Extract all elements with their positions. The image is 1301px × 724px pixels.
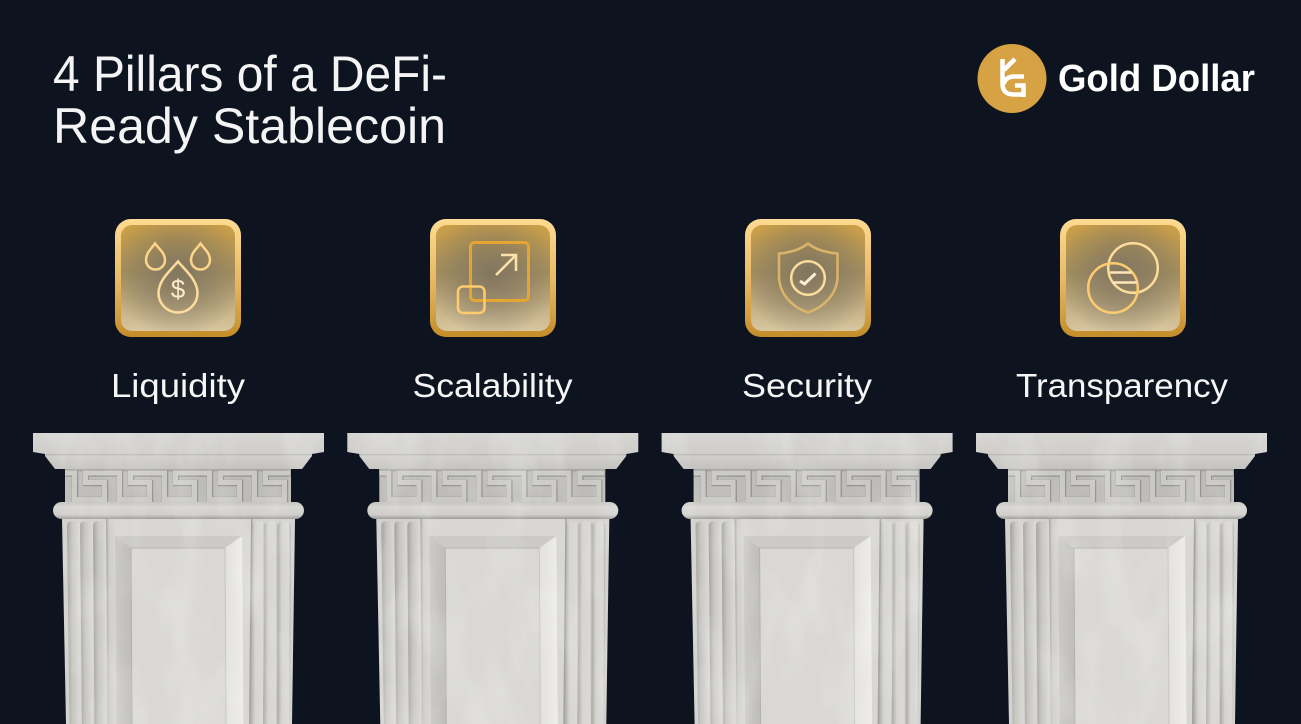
pillar [662, 433, 953, 724]
icon: scaling squares [430, 219, 556, 337]
title [53, 46, 447, 154]
icon: overlapping coins [1060, 219, 1186, 337]
icon: liquidity drops [115, 219, 241, 337]
pillar column: Liquidity [33, 219, 324, 724]
pillar [347, 433, 638, 724]
logo mark [978, 44, 1046, 113]
pillar column: Transparency [976, 219, 1267, 724]
label: Liquidity: Liquidity [111, 368, 245, 405]
label: Scalability: Scalability [412, 368, 573, 405]
title: 4 Pillars of a DeFi- [53, 46, 447, 102]
label: Transparency: Transparency [1016, 368, 1228, 405]
pillar column: Security [662, 219, 953, 724]
pillar [976, 433, 1267, 724]
icon: liquidity drops: $ [171, 274, 186, 304]
icon: shield check [745, 219, 871, 337]
logo wordmark: Gold Dollar [1058, 58, 1255, 100]
label: Security: Security [742, 368, 872, 405]
logo: Gold Dollar [978, 44, 1255, 113]
pillar [33, 433, 324, 724]
pillar column: Scalability [347, 219, 638, 724]
title: Ready Stablecoin [53, 98, 446, 154]
